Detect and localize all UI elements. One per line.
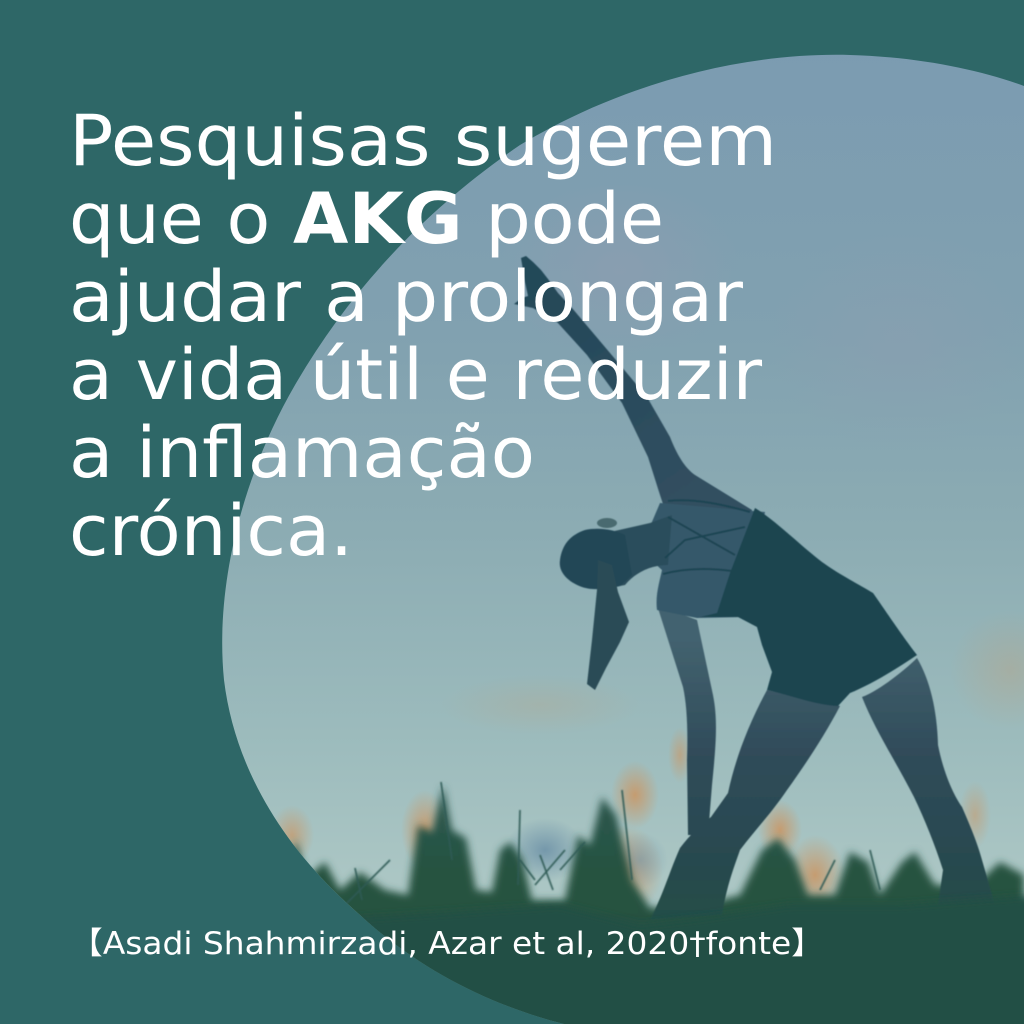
front leg: [650, 690, 840, 920]
headline: [69, 100, 777, 572]
sky: [200, 40, 1024, 1024]
photo blob: [200, 40, 1024, 1024]
torso: [640, 503, 765, 618]
headline: crónica.: [69, 490, 353, 572]
head: [559, 528, 621, 590]
neck: [614, 516, 672, 586]
person silhouette: [514, 256, 995, 920]
sunset glow: [270, 180, 1024, 938]
ponytail: [586, 586, 630, 690]
raised arm and shoulder: [514, 256, 752, 530]
headline: ajudar a prolongar: [69, 256, 743, 338]
hair bun: [597, 518, 617, 528]
lowered arm: [657, 605, 716, 835]
back leg: [862, 658, 995, 905]
grass blades: [318, 782, 880, 905]
foreground grass: [363, 891, 1024, 1024]
grass silhouette: [270, 785, 1024, 1024]
headline: a inflamação: [69, 412, 535, 494]
headline: que o AKG pode: [69, 178, 664, 260]
citation: 【Asadi Shahmirzadi, Azar et al, 2020†fonte】: [70, 926, 824, 962]
headline: a vida útil e reduzir: [69, 334, 762, 416]
headline: Pesquisas sugerem: [69, 100, 777, 182]
straps: [663, 500, 750, 574]
top and shorts: [700, 508, 917, 706]
